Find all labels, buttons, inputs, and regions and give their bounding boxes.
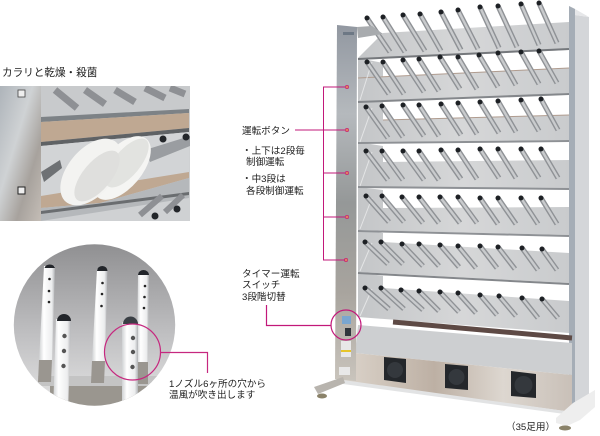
rack shelf strips xyxy=(358,49,572,338)
nozzles row 5 xyxy=(366,196,557,224)
nozzles row 7 xyxy=(365,288,558,318)
warning label xyxy=(341,341,351,357)
timer switch panel xyxy=(342,316,351,336)
heading: drying and sterilising: カラリと乾燥・殺菌 xyxy=(2,66,97,79)
text: timer switch label: 3段階切替 xyxy=(242,291,286,303)
rack back plates xyxy=(358,22,569,333)
fan right xyxy=(511,371,536,398)
callout: nozzle holes ring and leader xyxy=(104,324,208,380)
product: shoe drying rack xyxy=(314,3,595,430)
fan centre xyxy=(445,364,468,390)
callout: timer switch ring and leader xyxy=(266,305,361,340)
rack bottom rail xyxy=(343,380,572,415)
nameplate xyxy=(339,367,350,375)
callout: operation button leader lines xyxy=(295,87,345,260)
nozzles row 6 xyxy=(365,242,557,270)
fan left xyxy=(384,357,406,383)
rack base panel xyxy=(343,353,572,412)
text: 35 pair model note: （35足用） xyxy=(506,421,555,433)
text: middle three-stage control: 各段制御運転 xyxy=(246,185,304,197)
text: operation button label: 運転ボタン xyxy=(242,125,290,137)
photo: shoes on drying rack xyxy=(0,86,190,221)
text: nozzle hot air description: 1ノズル6ヶ所の穴から xyxy=(169,378,266,390)
nozzles row 2 xyxy=(367,51,557,94)
text: nozzle hot air description: 温風が吹き出します xyxy=(169,389,255,401)
photo: nozzle close-up circle xyxy=(13,243,177,417)
operation button markers xyxy=(344,85,349,262)
text: upper and lower two-stage control: 制御運転 xyxy=(246,156,285,168)
text: timer switch label: タイマー運転 xyxy=(242,268,300,280)
nozzles row 4 xyxy=(366,149,558,180)
text: timer switch label: スイッチ xyxy=(242,280,280,291)
text: upper and lower two-stage control: ・上下は2段毎 xyxy=(242,145,305,157)
rack right post xyxy=(569,6,589,412)
left foot xyxy=(314,377,345,398)
right foot xyxy=(556,390,595,430)
text: middle three-stage control: ・中3段は xyxy=(242,173,286,185)
rack left post xyxy=(335,25,383,381)
rack lower cover panel xyxy=(355,325,572,375)
nozzles row 3 xyxy=(366,99,558,138)
nozzles row 1 xyxy=(367,3,557,52)
